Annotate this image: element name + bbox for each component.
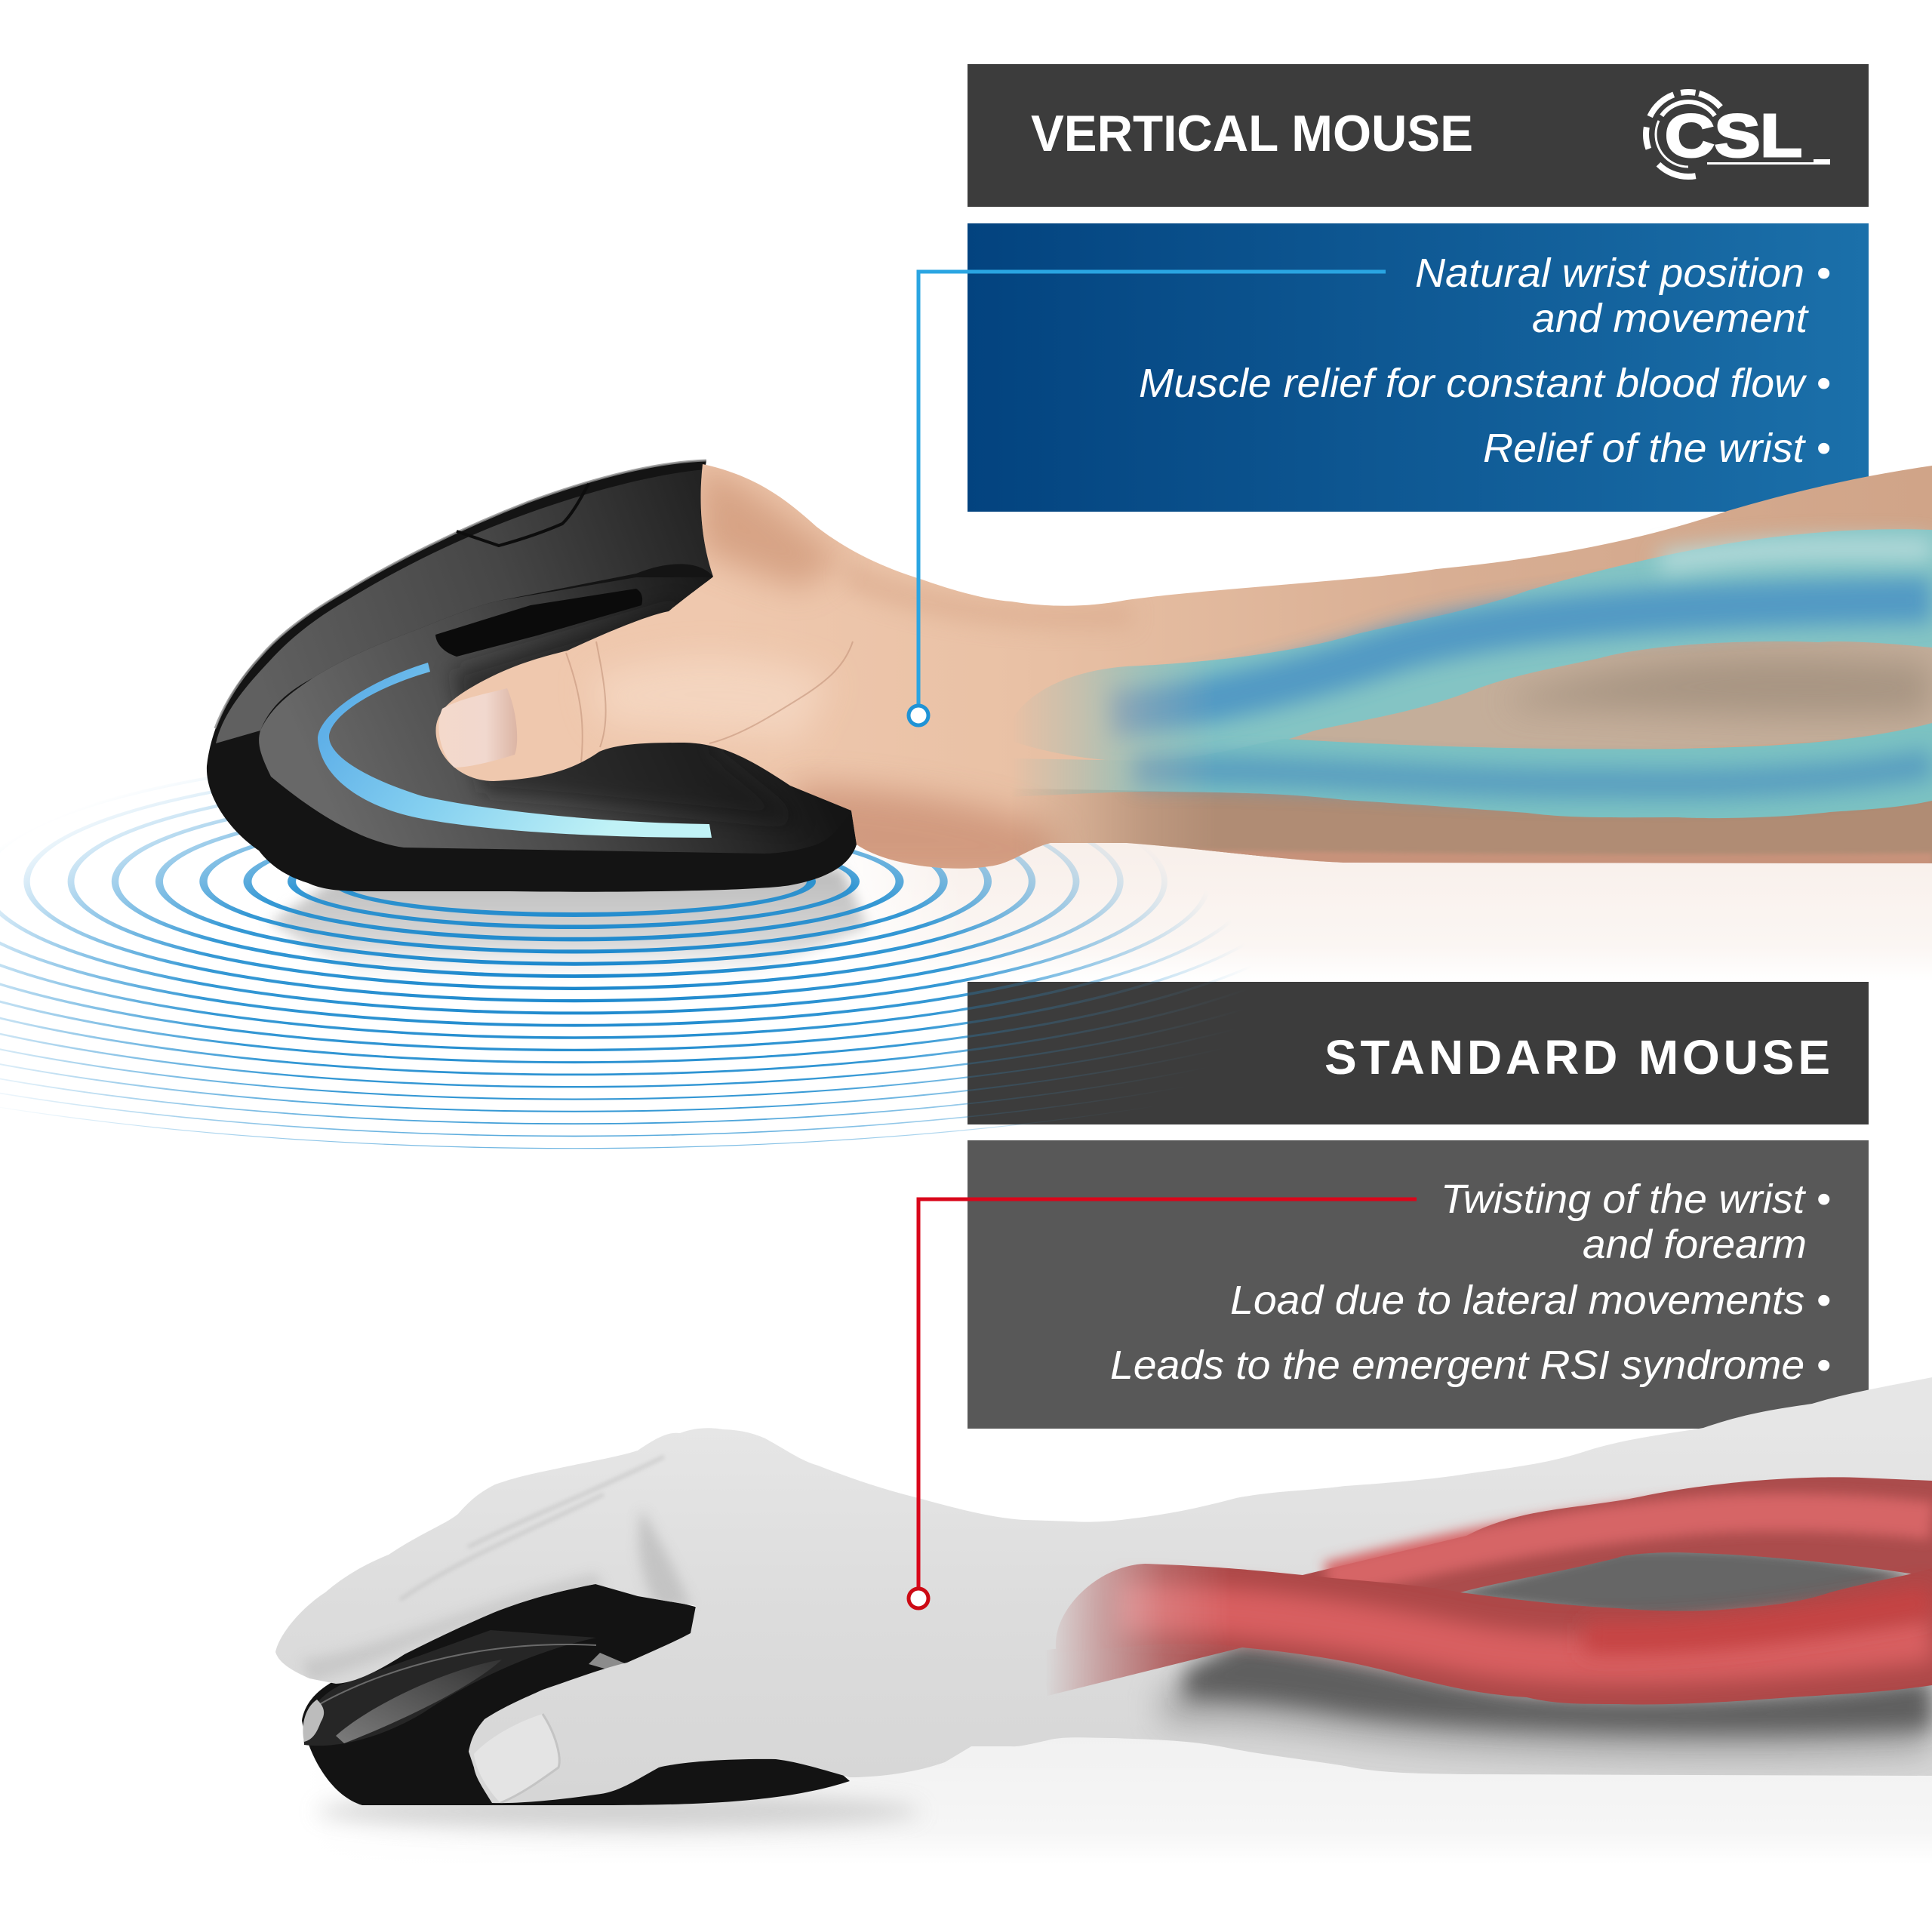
heading: standard mouse: STANDARD MOUSE: [1324, 1030, 1830, 1084]
benefit: natural wrist position: Natural wrist position •: [1415, 251, 1831, 296]
lower hand shading: [792, 785, 1057, 883]
drawback: and forearm: and forearm: [1583, 1222, 1807, 1267]
floor: standard mouse: [302, 1736, 1932, 1864]
thumb nail: [438, 688, 517, 768]
mouse top edge highlight: [215, 460, 706, 728]
shell contour line: [311, 1644, 596, 1709]
glossy streak: [336, 1660, 502, 1743]
muscle bands: relaxed blue: [1005, 529, 1932, 818]
shadow around thumb: [453, 604, 800, 823]
vertical mouse: [207, 460, 858, 892]
benefit: muscle relief: Muscle relief for constant blood flow •: [1139, 361, 1831, 406]
concentric wave rings: [0, 614, 1651, 1149]
panel: vertical mouse benefits: [968, 223, 1869, 512]
thumb creases: [566, 641, 853, 762]
thumb highlight: [589, 657, 830, 740]
LED light strip: [318, 663, 712, 838]
thumb nail: [474, 1714, 559, 1803]
forearm shadow: [1185, 1641, 1932, 1734]
glossy top shell: [304, 1630, 596, 1746]
floor shadow under vertical mouse: [270, 868, 868, 981]
drawback: load: Load due to lateral movements •: [1230, 1278, 1831, 1323]
photo: hand and arm on standard mouse: [275, 1377, 1932, 1803]
callout: red pointer to wrist: [909, 1199, 1417, 1608]
mouse side face: [259, 577, 851, 854]
table surface: vertical mouse: [830, 841, 1932, 981]
scroll button: [457, 484, 589, 546]
benefit: relief of the wrist: Relief of the wrist •: [1483, 426, 1831, 471]
mouse body: [207, 460, 858, 892]
mouse body: [302, 1581, 850, 1805]
standard mouse shadow: [317, 1795, 921, 1828]
panel: vertical mouse header: [968, 64, 1869, 207]
drawback: twisting: Twisting of the wrist •: [1441, 1177, 1831, 1222]
shade between muscles: [1460, 1552, 1911, 1611]
finger shading: [638, 1509, 691, 1607]
logo: CSL: CSL: [1665, 102, 1802, 169]
logo: CSL: [1646, 92, 1830, 177]
photo: hand and arm on vertical mouse: [435, 460, 1932, 883]
mouse top panel: [216, 469, 713, 743]
shade between muscles: [1268, 635, 1932, 749]
heading: vertical mouse: VERTICAL MOUSE: [1031, 105, 1473, 162]
front highlight: [303, 1700, 324, 1742]
muscle bands: strained red: [1041, 1477, 1932, 1705]
benefit: and movement: and movement: [1532, 296, 1809, 341]
hand top shading: [698, 460, 845, 589]
drawback: leads to RSI: Leads to the emergent RSI syndrome •: [1110, 1343, 1831, 1388]
panel: standard mouse header: [968, 982, 1869, 1124]
broad forearm shadow: [1162, 1653, 1932, 1756]
panel: standard mouse drawbacks: [968, 1140, 1869, 1429]
wrist top shading: [847, 566, 1124, 626]
standard mouse: [302, 1581, 850, 1805]
callout: blue pointer to wrist: [909, 272, 1386, 725]
arm lower shade: [1041, 789, 1932, 863]
side buttons: [435, 589, 642, 657]
